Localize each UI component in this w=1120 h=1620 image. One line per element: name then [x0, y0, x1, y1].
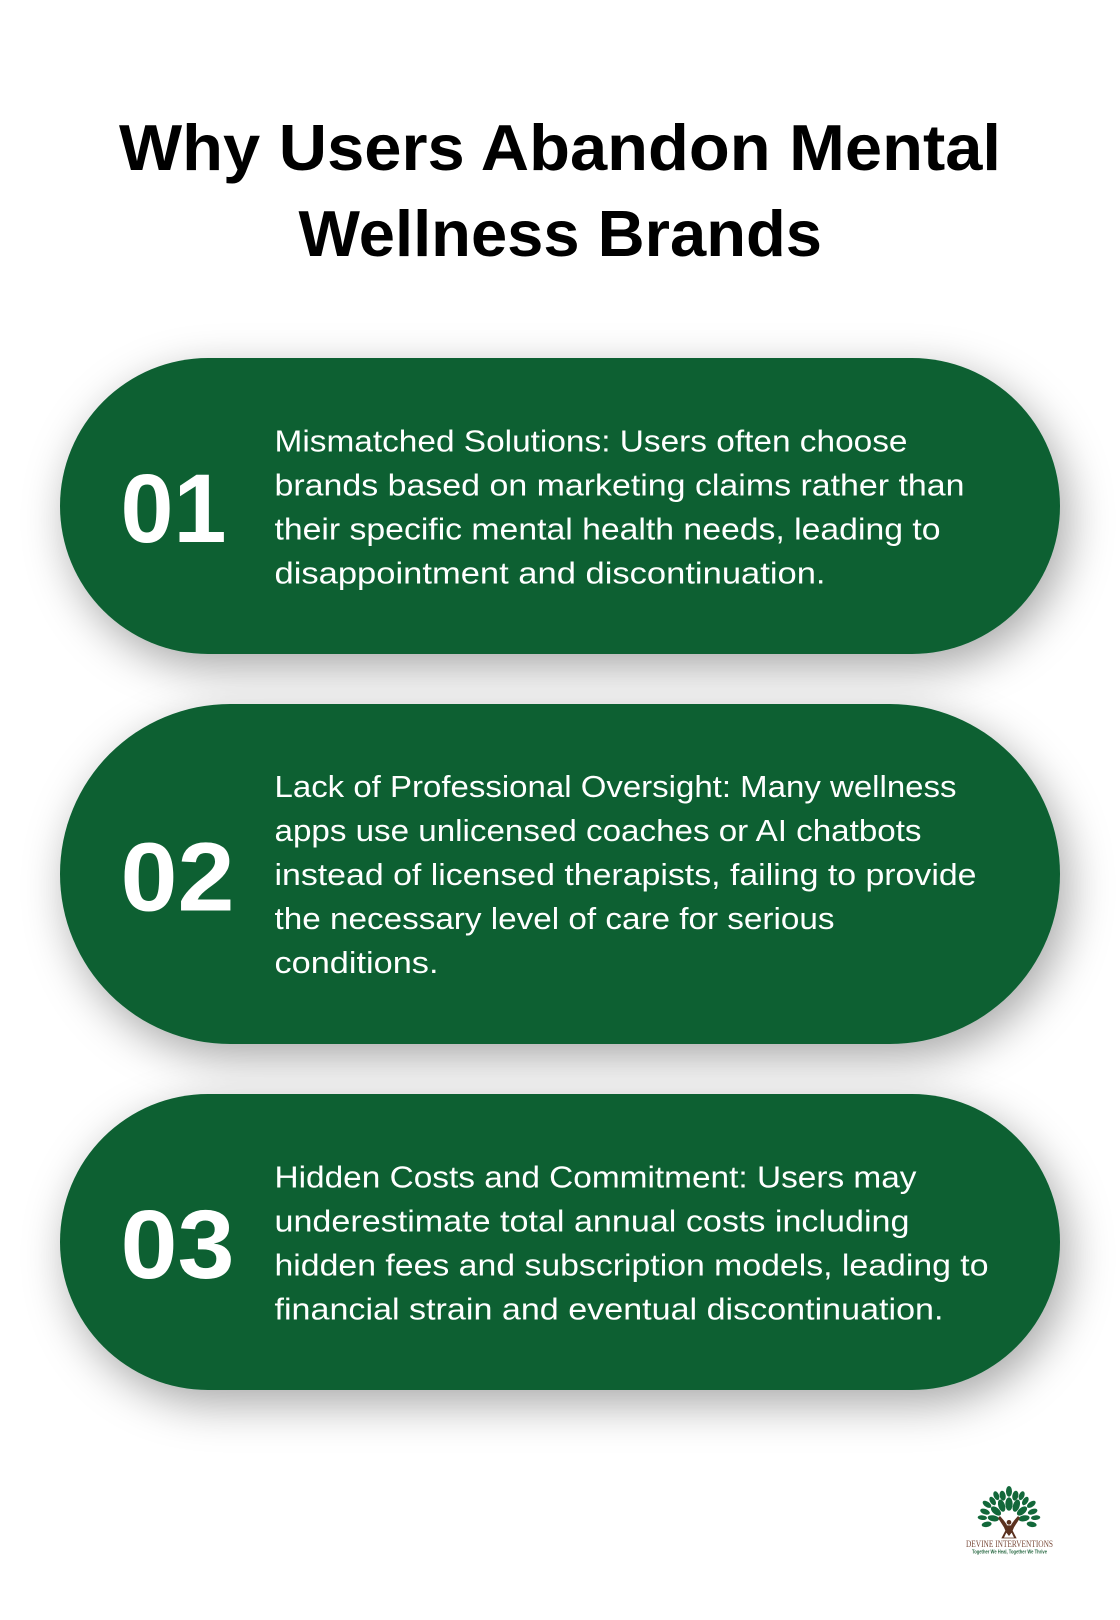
text block 01: disappointment and discontinuation. — [274, 555, 826, 590]
text block 03 — [274, 1159, 988, 1326]
tagline: Together We Heal, Together We Thrive — [972, 1550, 1047, 1556]
text block 03: hidden fees and subscription models, leading to — [274, 1247, 988, 1282]
text block 02: the necessary level of care for serious — [274, 901, 834, 936]
pill background 01 — [60, 358, 1060, 654]
title: Wellness Brands — [298, 197, 822, 270]
text block 02: conditions. — [274, 945, 438, 980]
text block 01: their specific mental health needs, leading to — [274, 511, 940, 546]
panel: reason 03 — [60, 1094, 1060, 1390]
text block 02: Lack of Professional Oversight: Many wellness — [274, 769, 957, 804]
pill background 03 — [60, 1094, 1060, 1390]
text block 01: brands based on marketing claims rather than — [274, 467, 964, 502]
text block 03: financial strain and eventual discontinuation. — [274, 1291, 944, 1326]
icon: tree — [977, 1486, 1041, 1538]
pill background 02 — [60, 704, 1060, 1044]
panel: reason 02 — [60, 704, 1060, 1044]
brand name: DEVINE INTERVENTIONS — [966, 1539, 1053, 1549]
text block 02: instead of licensed therapists, failing to provide — [274, 857, 976, 892]
number 03: 03 — [120, 1190, 234, 1299]
text block 02: apps use unlicensed coaches or AI chatbots — [274, 813, 922, 848]
text block 03: underestimate total annual costs including — [274, 1203, 910, 1238]
logo: Devine Interventions — [966, 1486, 1053, 1556]
title — [119, 111, 1001, 270]
number 02: 02 — [120, 822, 234, 932]
title: Why Users Abandon Mental — [119, 111, 1001, 184]
text block 01: Mismatched Solutions: Users often choose — [274, 423, 908, 458]
panel: reason 01 — [60, 358, 1060, 654]
text block 02 — [274, 769, 976, 980]
text block 03: Hidden Costs and Commitment: Users may — [274, 1159, 917, 1194]
text block 01 — [274, 423, 964, 590]
number 01: 01 — [120, 454, 226, 563]
